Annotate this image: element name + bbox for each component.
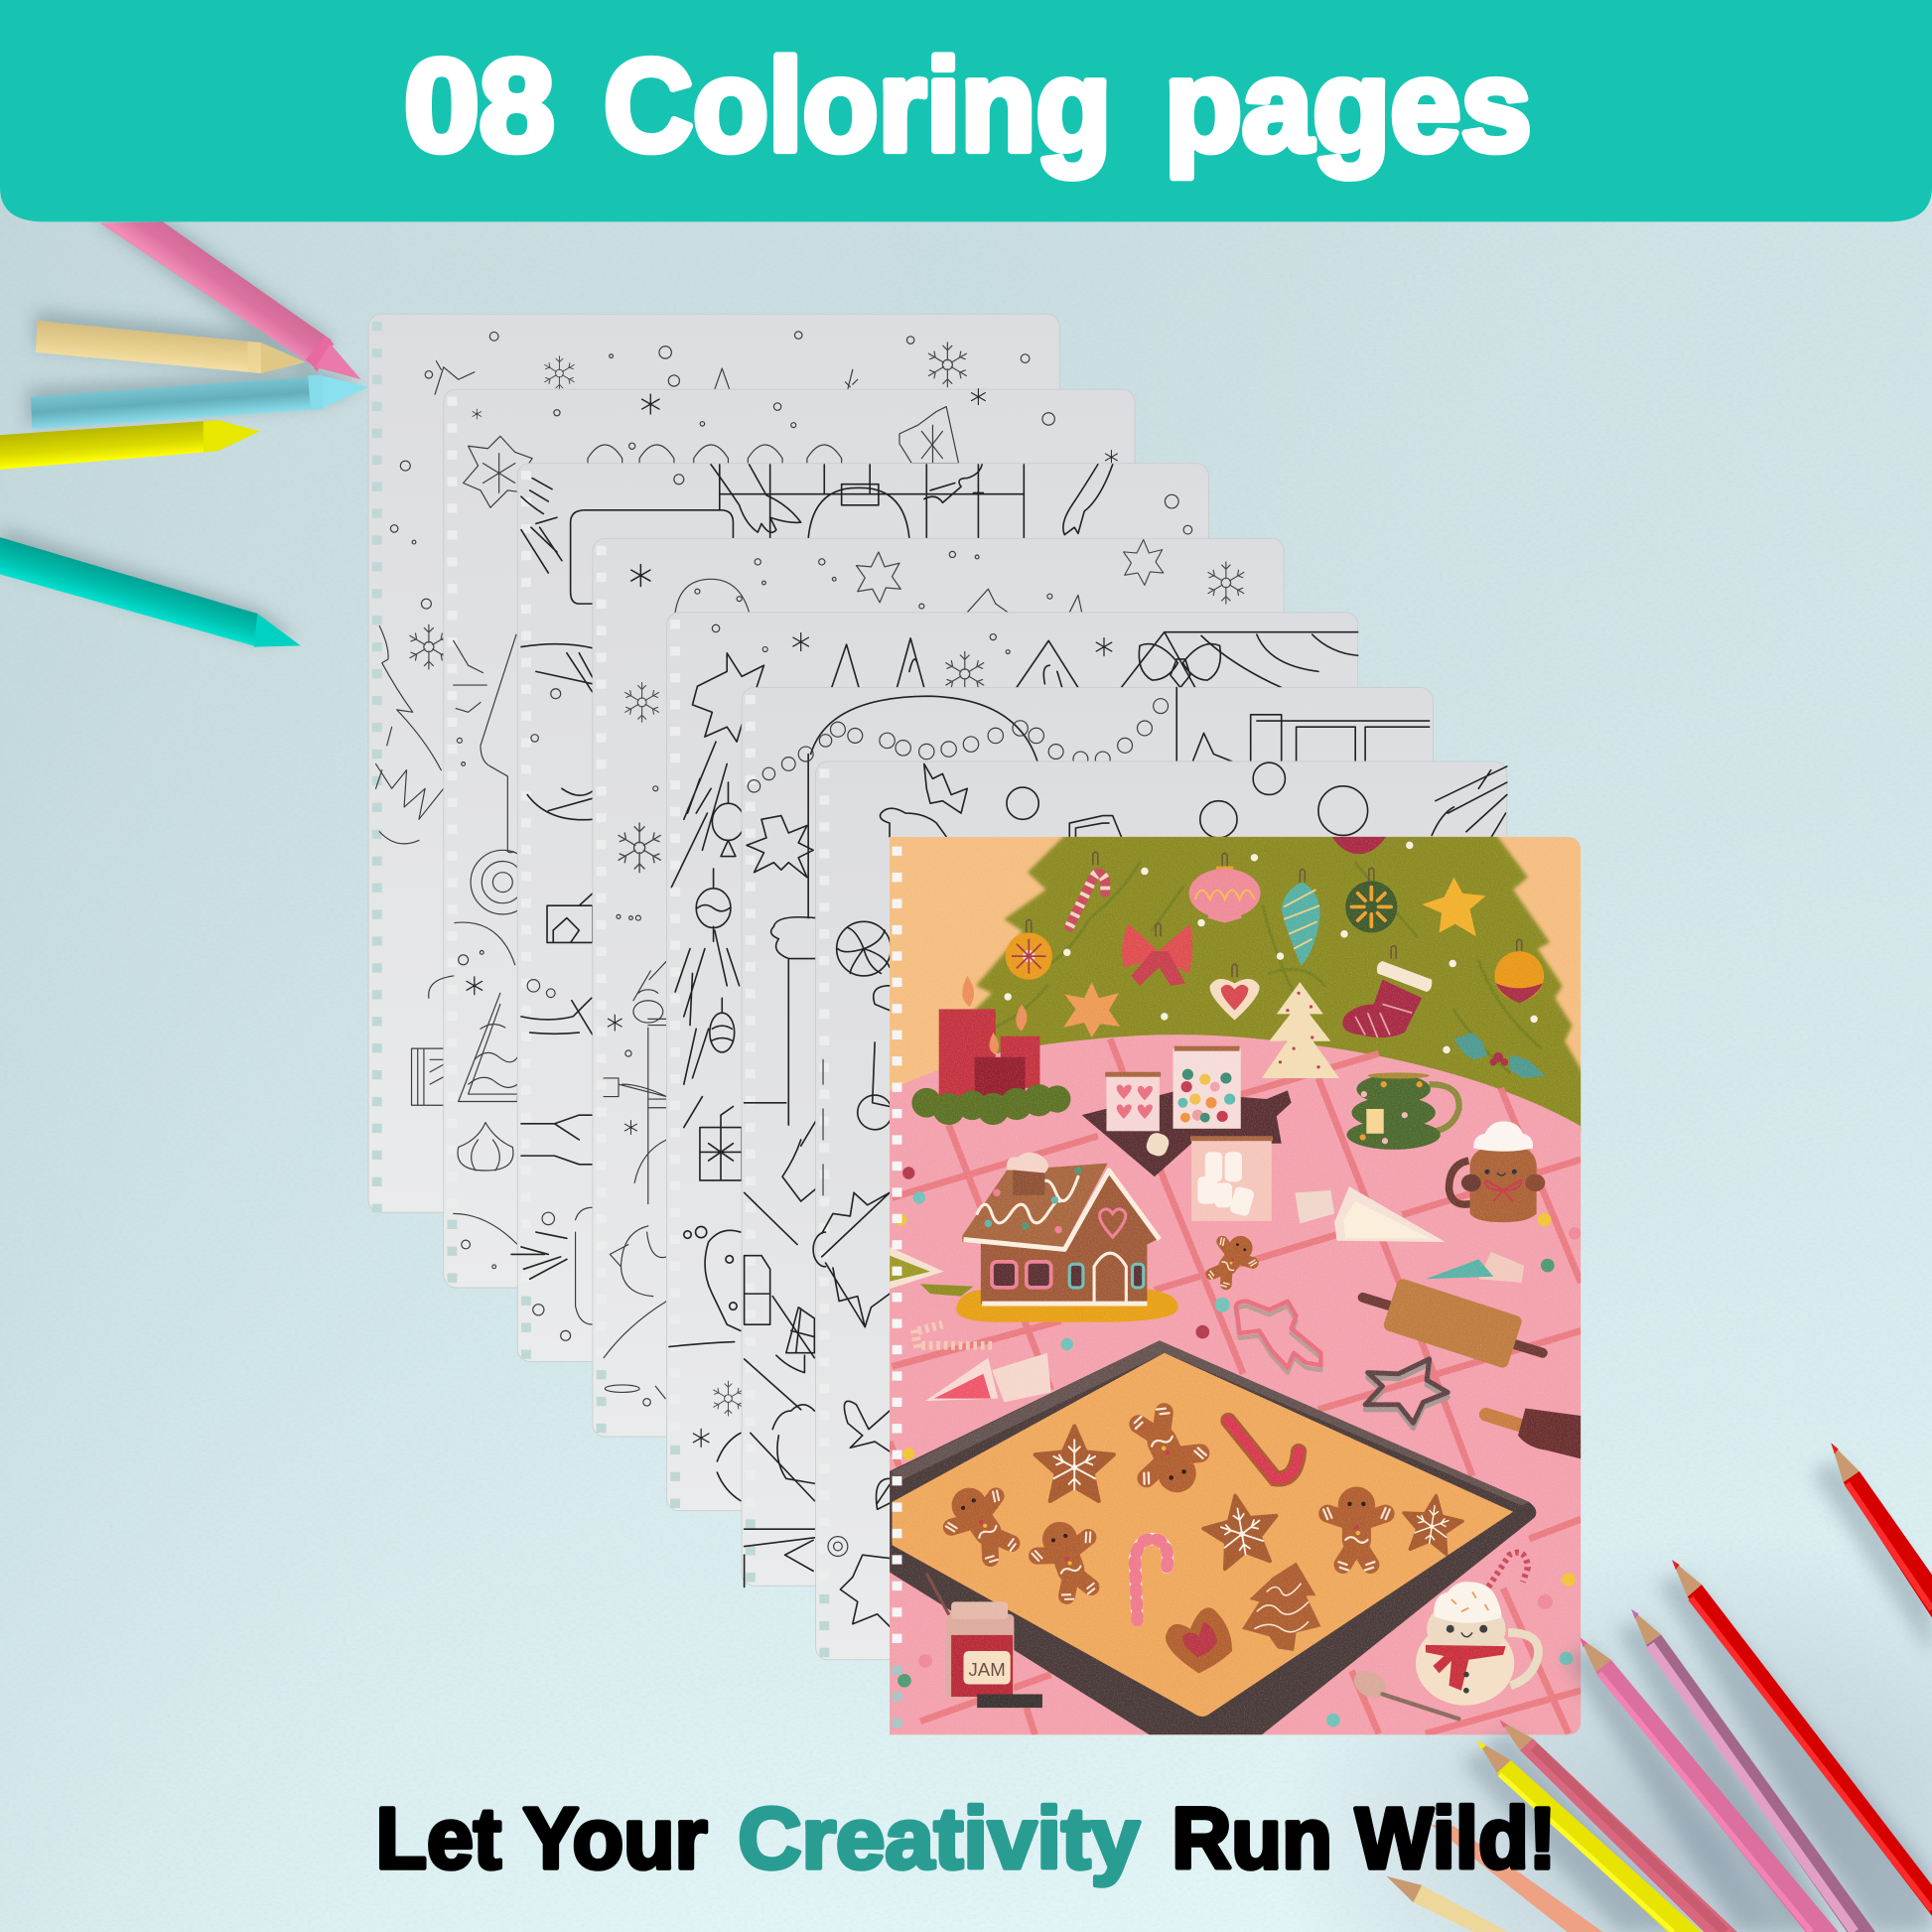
coloring sheet 5 bbox=[666, 613, 1358, 1511]
candy cane ornament bbox=[1069, 852, 1105, 926]
wooden spoon bbox=[1349, 1665, 1458, 1719]
snowflake star cookie 1 bbox=[1035, 1426, 1114, 1501]
door and windows bbox=[992, 1209, 1144, 1304]
orange ball ornament bbox=[1006, 919, 1052, 980]
pencil: pink bbox=[1580, 1637, 1839, 1932]
small heart jar bbox=[1105, 1072, 1161, 1131]
crayon: teal bbox=[0, 537, 301, 647]
yellow star ornament bbox=[1422, 878, 1486, 936]
crayons: top left group bbox=[0, 216, 368, 647]
jam jar bbox=[926, 1574, 1014, 1698]
star cookie cutter bbox=[1365, 1359, 1448, 1428]
heart jam cookie bbox=[1166, 1607, 1232, 1673]
heart ornament bbox=[1210, 964, 1260, 1021]
pencil: red short bbox=[1831, 1443, 1932, 1618]
teal piping bag bbox=[1426, 1252, 1524, 1283]
teal drop ornament bbox=[1282, 870, 1319, 966]
green tree mug bbox=[1346, 1072, 1459, 1150]
coloring sheet 3 bbox=[511, 464, 1208, 1361]
candy pieces bbox=[914, 1324, 996, 1348]
gingerbread house bbox=[962, 1153, 1160, 1304]
stocking ornament bbox=[1342, 946, 1432, 1037]
snowman mug bbox=[1416, 1582, 1538, 1706]
candy cane cookie 2 bbox=[1135, 1539, 1168, 1620]
small candy cane under tray bbox=[1488, 1553, 1528, 1587]
red bow ornament bbox=[1122, 923, 1192, 986]
header banner bbox=[0, 0, 1932, 221]
gingerbread man cookie 3 bbox=[1025, 1512, 1110, 1607]
gingerbread house plate bbox=[956, 1289, 1178, 1322]
title: pages bbox=[1165, 32, 1532, 178]
cream piping bag bbox=[1295, 1186, 1446, 1242]
large candy jar bbox=[1173, 1046, 1241, 1129]
small gingerbread man bbox=[1199, 1226, 1265, 1295]
full colour cover sheet bbox=[890, 834, 1589, 1734]
pencil: salmon bbox=[1432, 1825, 1603, 1932]
marshmallow jar bbox=[1190, 1136, 1273, 1221]
title bbox=[404, 32, 1532, 178]
crayon shadows bbox=[0, 216, 363, 640]
crayon: pink bbox=[100, 221, 361, 379]
pencil: red long bbox=[1672, 1560, 1932, 1916]
red orange bauble ornament bbox=[1494, 939, 1544, 1003]
coloring sheet 1 bbox=[368, 314, 1059, 1212]
pencil: dusty rose bbox=[1499, 1721, 1737, 1932]
gingerbread man cookie 2 bbox=[1118, 1399, 1216, 1505]
coloring sheet 6 bbox=[742, 688, 1433, 1587]
pink cookie cutter bbox=[1236, 1302, 1320, 1373]
coloured pencils: bottom right group bbox=[1386, 1443, 1932, 1932]
coloring sheet 4 bbox=[593, 538, 1284, 1437]
crayon: sky blue bbox=[31, 374, 368, 429]
tree shading bbox=[980, 863, 1540, 1072]
pencil: yellow bbox=[1477, 1740, 1702, 1932]
tree cookie bbox=[1242, 1563, 1320, 1651]
tagline: run wild: Run Wild! bbox=[1172, 1790, 1556, 1886]
holly sprig bbox=[1453, 1033, 1545, 1078]
rolling pin bbox=[1363, 1278, 1543, 1369]
crayon grain texture bbox=[890, 837, 1581, 1734]
chimney bbox=[1007, 1153, 1048, 1195]
house roof bbox=[962, 1164, 1108, 1249]
snowflake star cookie 2 bbox=[1199, 1489, 1284, 1572]
red candles bbox=[939, 976, 1039, 1098]
snowflake star cookie 3 bbox=[1399, 1491, 1465, 1556]
pink bauble ornament bbox=[1189, 853, 1261, 923]
dark rolling pin bbox=[1486, 1409, 1581, 1458]
tablecloth stripes bbox=[890, 1038, 1581, 1734]
icing bbox=[964, 1171, 1160, 1304]
black bar bbox=[977, 1694, 1042, 1708]
gingerbread mug bbox=[1449, 1121, 1545, 1222]
coloring sheet 2 bbox=[429, 389, 1135, 1288]
candle greenery bbox=[911, 1084, 1070, 1125]
cover binding holes bbox=[894, 847, 901, 1734]
pink piping bag bbox=[925, 1353, 1051, 1402]
house walls bbox=[981, 1173, 1160, 1304]
gingerbread man cookie 4 bbox=[1323, 1486, 1390, 1571]
orange star ornament bbox=[1063, 982, 1120, 1037]
candy cane cookie 1 bbox=[1228, 1421, 1299, 1478]
cover background bbox=[890, 837, 1581, 1734]
cutting board bbox=[1082, 1090, 1292, 1176]
tagline: creativity: Creativity bbox=[738, 1790, 1140, 1886]
title: 08 bbox=[404, 32, 554, 178]
tagline bbox=[376, 1790, 1556, 1886]
crayon: yellow bbox=[0, 420, 260, 470]
cookie tree bbox=[1262, 982, 1339, 1078]
pencil shadows bbox=[1460, 1460, 1932, 1932]
christmas tree bbox=[946, 834, 1589, 1134]
title: Coloring bbox=[604, 32, 1111, 178]
coloring sheet 7 bbox=[813, 761, 1507, 1660]
gingerbread man cookie 1 bbox=[933, 1473, 1030, 1573]
tray baking paper bbox=[893, 1353, 1513, 1717]
banner background bbox=[0, 0, 1932, 221]
confetti and snow dots bbox=[895, 837, 1581, 1726]
baking tray bbox=[890, 1340, 1536, 1734]
roof candy dots bbox=[985, 1167, 1082, 1233]
crayon: cream yellow bbox=[36, 321, 306, 373]
tablecloth bbox=[890, 1035, 1581, 1734]
left edge tree shape bbox=[890, 1247, 973, 1297]
marshmallow on board bbox=[1144, 1131, 1172, 1159]
dark green round ornament bbox=[1345, 868, 1397, 932]
tagline: let your: Let Your bbox=[376, 1790, 707, 1886]
jam label: JAM bbox=[968, 1659, 1006, 1680]
pencil: cream bbox=[1386, 1876, 1508, 1932]
pencil: mauve bbox=[1631, 1609, 1875, 1932]
